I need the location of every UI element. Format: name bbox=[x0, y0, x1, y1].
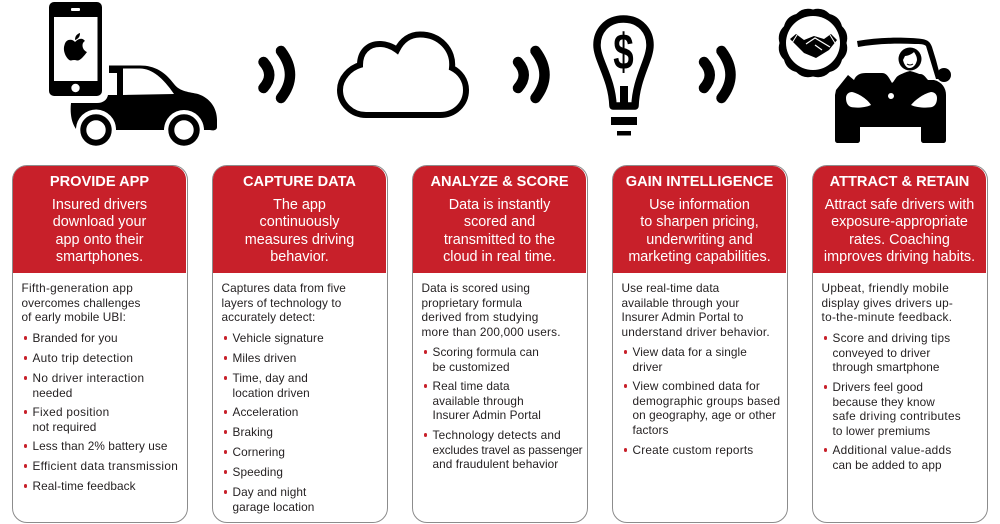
panel header: analyze and score bbox=[413, 166, 586, 272]
text block: intro: proprietary formula bbox=[422, 296, 522, 310]
bullet: and fraudulent behavior bbox=[432, 457, 558, 471]
bullet: Real time data bbox=[432, 379, 510, 393]
bullet: Less than 2% battery use bbox=[32, 439, 168, 453]
icon: signal waves 3 bbox=[704, 51, 730, 98]
text block: intro: Captures data from five bbox=[222, 281, 346, 295]
text block: intro: Insurer Admin Portal to bbox=[622, 310, 743, 324]
bullet: because they know bbox=[832, 394, 935, 408]
bullet: Day and night bbox=[232, 485, 306, 499]
text block: intro: to-the-minute feedback. bbox=[822, 310, 952, 324]
panel header: gain intelligence: GAIN INTELLIGENCE bbox=[626, 174, 773, 190]
text block: intro: layers of technology to bbox=[222, 296, 341, 310]
bullet: through smartphone bbox=[832, 360, 940, 374]
panel header: capture data: measures driving bbox=[245, 232, 354, 248]
bullet: Branded for you bbox=[32, 331, 118, 345]
icons row bbox=[49, 2, 951, 146]
bullet: conveyed to driver bbox=[832, 346, 930, 360]
bullet bbox=[32, 371, 144, 400]
icon: smartphone with apple logo bbox=[49, 2, 102, 96]
bullet bbox=[432, 345, 539, 374]
bullet: Real-time feedback bbox=[32, 479, 136, 493]
panel header: attract and retain: rates. Coaching bbox=[849, 232, 950, 248]
panel header: attract and retain: improves driving habits. bbox=[824, 249, 975, 265]
text block: intro: accurately detect: bbox=[222, 310, 315, 324]
bullet: can be added to app bbox=[832, 458, 942, 472]
icon: cloud bbox=[340, 34, 466, 115]
panel: gain intelligence bbox=[612, 165, 788, 523]
bullet bbox=[232, 371, 310, 400]
bullet: View combined data for bbox=[632, 379, 760, 393]
bullet: Vehicle signature bbox=[232, 331, 324, 345]
icon: front view car with driver bbox=[835, 38, 951, 143]
panel: capture data bbox=[212, 165, 388, 523]
bullet: Braking bbox=[232, 425, 273, 439]
text block: intro: Data is scored using bbox=[422, 281, 530, 295]
bullet: Insurer Admin Portal bbox=[432, 408, 541, 422]
bullet: location driven bbox=[232, 386, 310, 400]
bullet: Fixed position bbox=[32, 405, 110, 419]
panel header: analyze and score: scored and bbox=[464, 214, 535, 230]
panel header: provide app: smartphones. bbox=[56, 249, 143, 265]
bullet: not required bbox=[32, 420, 96, 434]
text block: intro bbox=[222, 281, 346, 324]
panel header: analyze and score: Data is instantly bbox=[449, 197, 550, 213]
bullet: Create custom reports bbox=[632, 443, 753, 457]
bullet: Cornering bbox=[232, 445, 285, 459]
bullet: on geography, age or other bbox=[632, 408, 776, 422]
panel header: attract and retain: ATTRACT & RETAIN bbox=[830, 174, 969, 190]
bullet: No driver interaction bbox=[32, 371, 144, 385]
bullet: Time, day and bbox=[232, 371, 308, 385]
bullet bbox=[832, 331, 950, 374]
panel header: gain intelligence: marketing capabilities. bbox=[628, 249, 771, 265]
panel header: gain intelligence: underwriting and bbox=[646, 232, 753, 248]
text block: intro: display gives drivers up- bbox=[822, 296, 953, 310]
bullet: Technology detects and bbox=[432, 428, 561, 442]
panel header: gain intelligence: Use information bbox=[649, 197, 750, 213]
panel header: provide app: Insured drivers bbox=[52, 197, 147, 213]
bullet: be customized bbox=[432, 360, 510, 374]
bullet: Efficient data transmission bbox=[32, 459, 178, 473]
text block: intro bbox=[422, 281, 561, 338]
bullet: demographic groups based bbox=[632, 394, 780, 408]
text block: intro: derived from studying bbox=[422, 310, 538, 324]
panel: attract and retain bbox=[812, 165, 988, 523]
text block: intro: more than 200,000 users. bbox=[422, 324, 561, 338]
panel header: capture data: The app bbox=[273, 197, 326, 213]
icon: light bulb with dollar sign: $ bbox=[613, 24, 634, 80]
bullet: Drivers feel good bbox=[832, 380, 923, 394]
panel header: capture data: behavior. bbox=[270, 249, 329, 265]
icon: signal waves 2 bbox=[518, 51, 544, 98]
text block: intro: overcomes challenges bbox=[22, 296, 140, 310]
text block: intro: available through your bbox=[622, 296, 739, 310]
bullet bbox=[432, 379, 541, 422]
text block: intro bbox=[22, 281, 140, 324]
text block: intro: Use real-time data bbox=[622, 281, 719, 295]
panel: analyze and score bbox=[412, 165, 588, 523]
panel header: gain intelligence: to sharpen pricing, bbox=[640, 214, 759, 230]
panel header: capture data: continuously bbox=[260, 214, 340, 230]
panel header: provide app: download your bbox=[53, 214, 146, 230]
icon: side view car bbox=[71, 66, 217, 143]
bullet: Acceleration bbox=[232, 405, 298, 419]
panel header: attract and retain: exposure-appropriate bbox=[831, 214, 968, 230]
panel header: analyze and score: ANALYZE & SCORE bbox=[430, 174, 569, 190]
bullet: needed bbox=[32, 386, 72, 400]
panel header: attract and retain bbox=[813, 166, 986, 272]
bullet bbox=[832, 443, 952, 472]
bullet: factors bbox=[632, 422, 668, 436]
bullet: safe driving contributes bbox=[832, 409, 961, 423]
bullet bbox=[232, 485, 314, 514]
text block: intro bbox=[622, 281, 770, 338]
text block: intro: understand driver behavior. bbox=[622, 324, 770, 338]
bullet: Miles driven bbox=[232, 351, 296, 365]
bullet: Speeding bbox=[232, 465, 283, 479]
icon: signal waves 1 bbox=[264, 51, 290, 98]
bullet: garage location bbox=[232, 500, 314, 514]
panel header: provide app: PROVIDE APP bbox=[50, 174, 149, 190]
bullet bbox=[32, 405, 110, 434]
panel header: analyze and score: cloud in real time. bbox=[443, 249, 556, 265]
panel: provide app bbox=[12, 165, 188, 523]
bullet: Auto trip detection bbox=[32, 351, 133, 365]
bullet bbox=[832, 380, 961, 438]
panel header: provide app bbox=[13, 166, 186, 272]
text block: intro: Upbeat, friendly mobile bbox=[822, 281, 949, 295]
panel header: analyze and score: transmitted to the bbox=[444, 232, 555, 248]
text block: intro: Fifth-generation app bbox=[22, 281, 133, 295]
bullet: Score and driving tips bbox=[832, 331, 950, 345]
text block: intro: of early mobile UBI: bbox=[22, 310, 126, 324]
bullet: to lower premiums bbox=[832, 424, 930, 438]
bullet: driver bbox=[632, 360, 662, 374]
panel header: attract and retain: Attract safe drivers with bbox=[825, 197, 974, 213]
bullet bbox=[632, 379, 780, 437]
panel header: gain intelligence bbox=[613, 166, 786, 272]
icon: light bulb with dollar sign bbox=[597, 19, 650, 136]
bullet: excludes travel as passenger bbox=[432, 442, 582, 456]
panel header: capture data bbox=[213, 166, 386, 272]
bullet bbox=[632, 345, 747, 374]
bullet: View data for a single bbox=[632, 345, 747, 359]
bullet: Scoring formula can bbox=[432, 345, 539, 359]
bullet: Additional value-adds bbox=[832, 443, 952, 457]
icon: handshake badge bbox=[779, 9, 847, 77]
bullet bbox=[432, 428, 582, 472]
bullet: available through bbox=[432, 394, 524, 408]
panel header: provide app: app onto their bbox=[55, 232, 144, 248]
text block: intro bbox=[822, 281, 953, 324]
panel header: capture data: CAPTURE DATA bbox=[243, 174, 356, 190]
